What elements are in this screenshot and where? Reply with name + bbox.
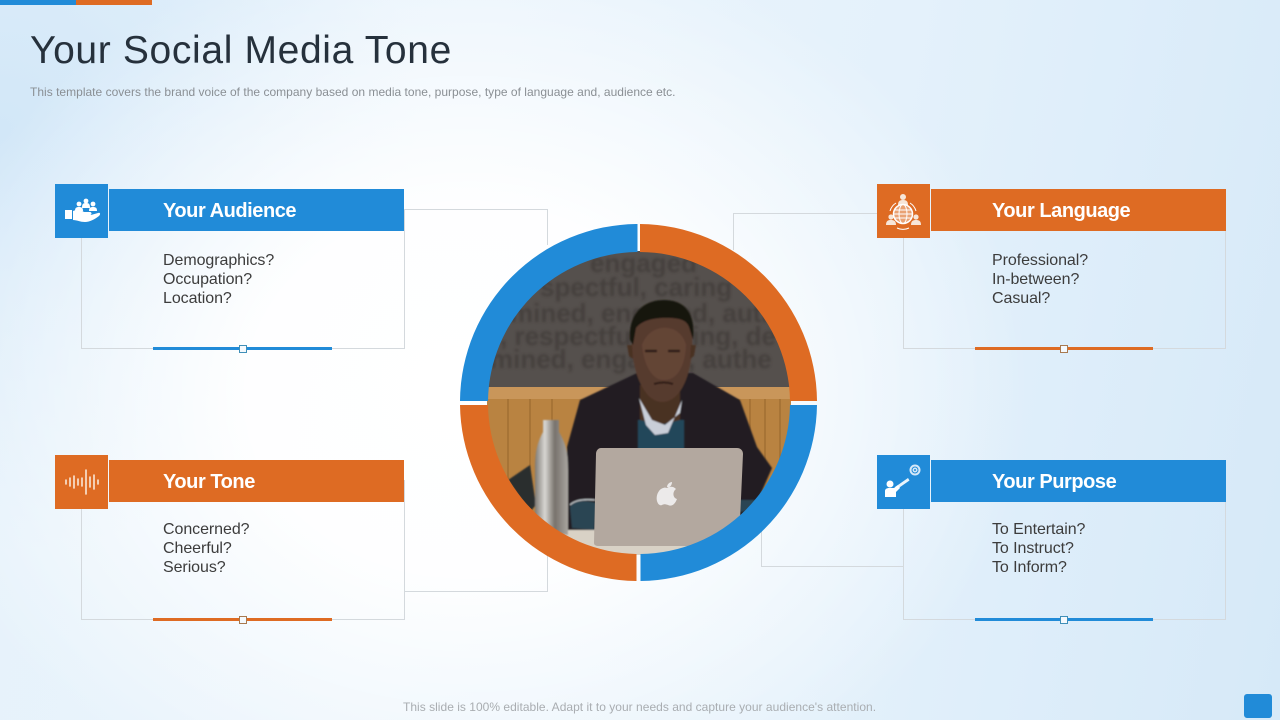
- panel: your tone: [55, 455, 405, 624]
- bag: [508, 465, 536, 512]
- list: Professional?: [992, 252, 1088, 269]
- card outline: [903, 480, 1226, 620]
- list: [163, 252, 274, 307]
- icon: globe with people: [877, 184, 930, 238]
- heading: your language: Your Language: [992, 200, 1130, 222]
- list: Occupation?: [163, 271, 252, 288]
- list: In-between?: [992, 271, 1079, 288]
- photo: man at laptop: , respectful, caring, de: [500, 321, 776, 351]
- list: [163, 521, 249, 576]
- list: To Inform?: [992, 559, 1067, 576]
- title: Your Social Media Tone: [30, 29, 452, 72]
- subtitle: This template covers the brand voice of the company based on media tone, purpose, type of language and, audience etc.: [30, 85, 676, 99]
- heading: your purpose: Your Purpose: [992, 471, 1116, 493]
- ring: orange top-right: [640, 224, 817, 401]
- card outline: [81, 209, 405, 349]
- list: To Entertain?: [992, 521, 1085, 538]
- icon: hand holding people: [55, 184, 108, 238]
- head: [632, 312, 692, 402]
- laptop: [594, 448, 743, 546]
- photo: man at laptop: engaged: [590, 248, 697, 278]
- list: To Instruct?: [992, 540, 1074, 557]
- ring: blue top-left: [460, 224, 638, 401]
- left cuff: [570, 501, 596, 530]
- accent slider: [153, 616, 332, 624]
- right cuff: [740, 500, 757, 512]
- panel: your language: [877, 184, 1226, 353]
- card outline: [903, 209, 1226, 349]
- man body: [567, 373, 772, 530]
- icon: sound wave: [55, 455, 108, 509]
- heading: your audience: Your Audience: [163, 200, 296, 222]
- heading: your tone: Your Tone: [163, 471, 255, 493]
- list: Location?: [163, 290, 232, 307]
- photo: man at laptop: spectful, caring: [540, 272, 732, 302]
- heading: your purpose: [931, 460, 1226, 502]
- list: Demographics?: [163, 252, 274, 269]
- bottle: [535, 420, 568, 535]
- photo: man at laptop: mined, engaged, authe: [490, 344, 772, 374]
- center ring with photo: [460, 224, 817, 581]
- neck: [640, 385, 680, 425]
- photo: man at laptop: [487, 251, 791, 555]
- heading: your tone: [109, 460, 404, 502]
- panel: your audience: [55, 184, 405, 353]
- footer note: This slide is 100% editable. Adapt it to your needs and capture your audience's attention.: [403, 700, 876, 714]
- table: [562, 528, 688, 555]
- sweater: [638, 420, 684, 450]
- list: Concerned?: [163, 521, 249, 538]
- accent slider: [153, 345, 332, 353]
- list: [992, 252, 1088, 307]
- heading: your audience: [109, 189, 404, 231]
- card outline: [81, 480, 405, 620]
- photo: man at laptop: mined, engaged, authe: [510, 298, 792, 328]
- top accent bars: [0, 0, 152, 5]
- list: [992, 521, 1085, 576]
- ring: orange bottom-left: [460, 405, 636, 581]
- list: Cheerful?: [163, 540, 232, 557]
- accent slider: [975, 616, 1153, 624]
- heading: your language: [931, 189, 1226, 231]
- shirt collar: [639, 398, 682, 435]
- accent slider: [975, 345, 1153, 353]
- list: Casual?: [992, 290, 1050, 307]
- corner square: [1244, 694, 1272, 718]
- icon: person aiming at target: [877, 455, 930, 509]
- ring: blue bottom-right: [640, 405, 817, 581]
- panel: your purpose: [877, 455, 1226, 624]
- list: Serious?: [163, 559, 226, 576]
